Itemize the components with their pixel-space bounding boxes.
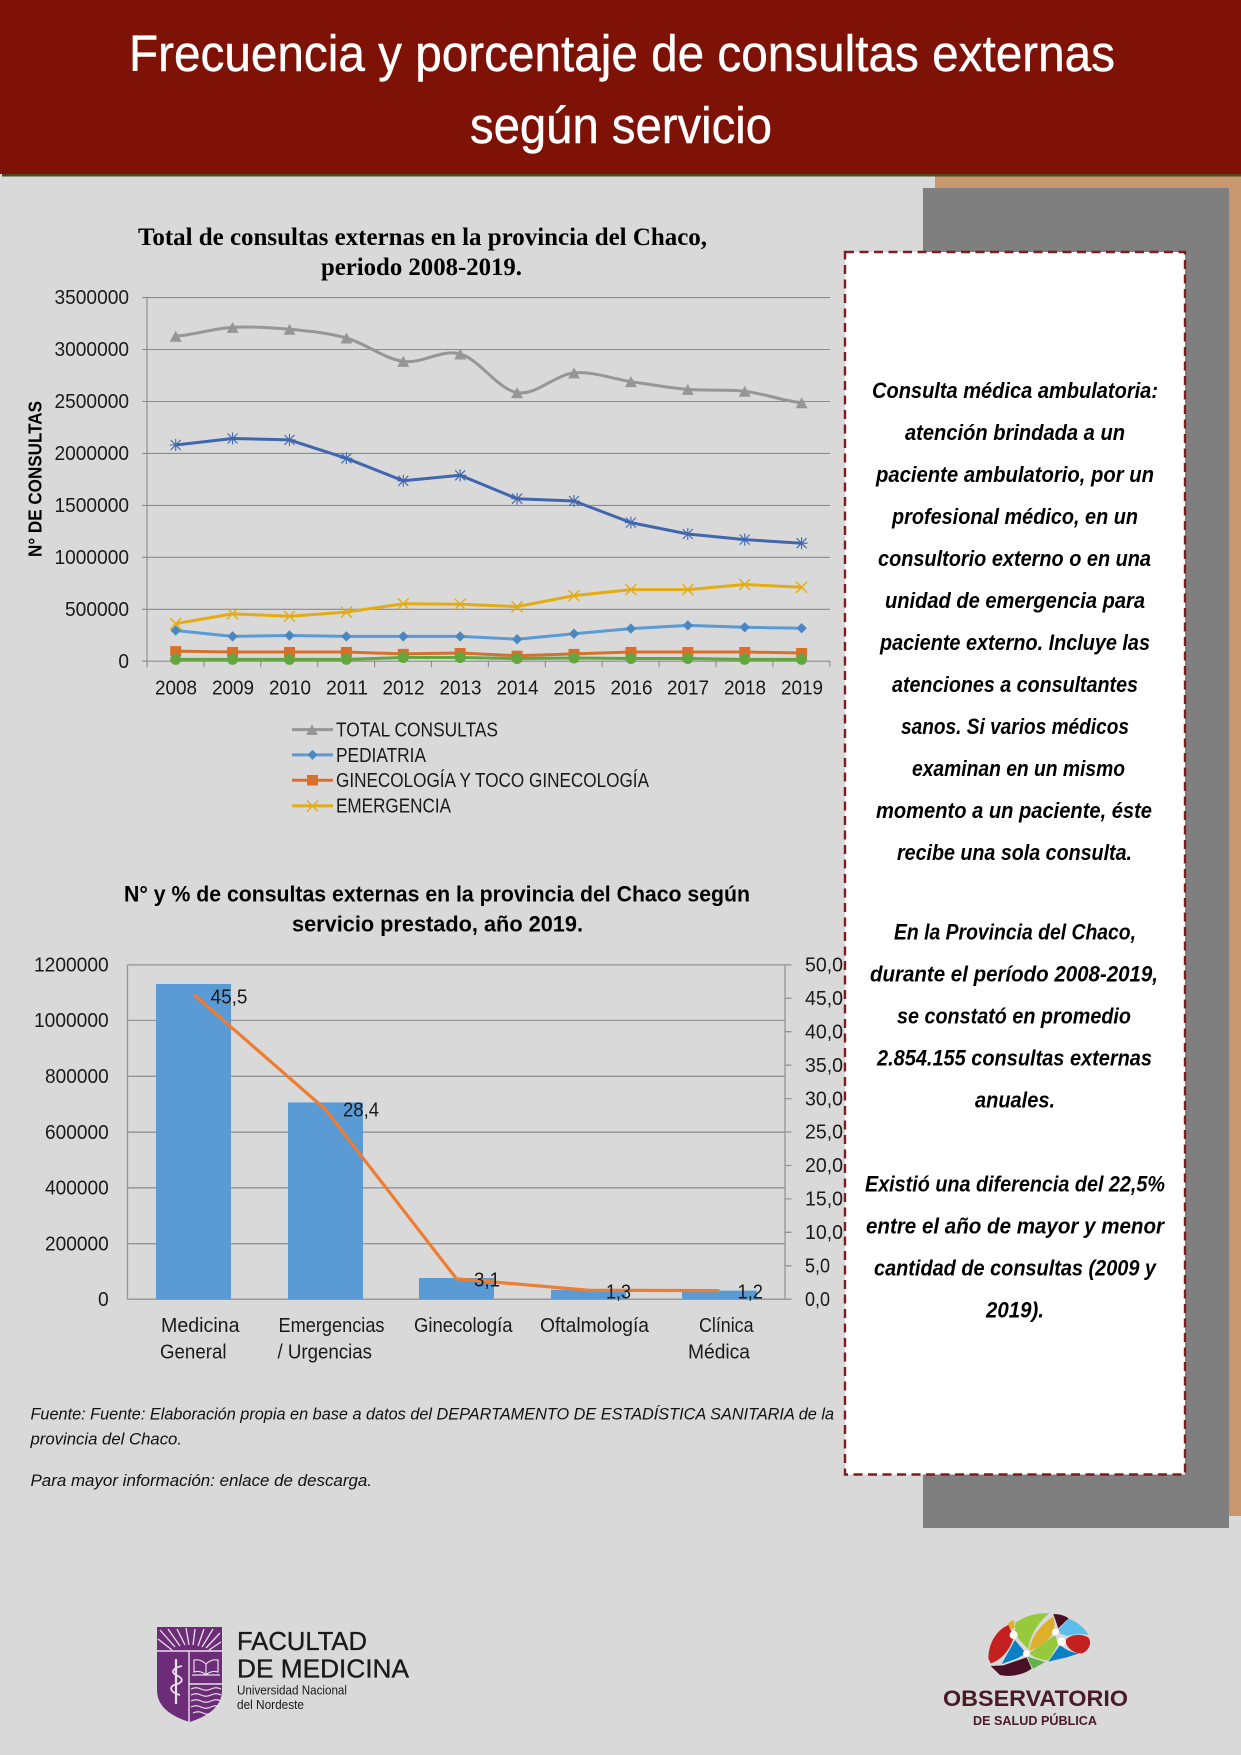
definition panel <box>845 252 1185 1474</box>
series: ginecologia <box>176 651 802 656</box>
left axis labels: 800000 <box>45 1066 109 1088</box>
source note <box>30 1404 834 1490</box>
x axis labels: 2014 <box>496 678 538 700</box>
line chart: total consultations 2008-2019 <box>24 224 830 818</box>
x axis labels: 2009 <box>212 678 254 700</box>
paragraph: definition: paciente externo. Incluye las <box>879 630 1150 655</box>
faculty name <box>237 1626 410 1712</box>
legend: PEDIATRIA <box>336 745 427 767</box>
right axis labels: 50,0 <box>805 954 843 976</box>
x axis labels: 2015 <box>554 678 596 700</box>
title: Frecuencia y porcentaje de consultas externas <box>129 25 1115 82</box>
left axis labels <box>34 954 109 1311</box>
left axis labels: 600000 <box>45 1122 109 1144</box>
series: green <box>176 658 802 659</box>
right axis labels: 40,0 <box>805 1022 843 1044</box>
right axis labels: 30,0 <box>805 1088 843 1110</box>
category labels: Medicina <box>161 1315 240 1337</box>
x axis labels: 2018 <box>724 678 766 700</box>
y axis labels: 1500000 <box>54 495 129 517</box>
y axis labels: 2000000 <box>54 443 129 465</box>
paragraph: definition: consultorio externo o en una <box>878 546 1151 571</box>
source note: Para mayor información: enlace de descarga. <box>30 1471 372 1490</box>
x axis labels: 2017 <box>667 678 709 700</box>
category labels: Médica <box>688 1342 751 1364</box>
series: total consultas <box>176 327 802 403</box>
data labels: 45,5 <box>210 986 248 1008</box>
faculty name: Universidad Nacional <box>237 1682 347 1698</box>
paragraph: definition: atención brindada a un <box>905 420 1125 445</box>
paragraph: definition: recibe una sola consulta. <box>897 840 1132 865</box>
x axis labels: 2016 <box>610 678 652 700</box>
bars <box>156 984 757 1299</box>
line chart title: Total de consultas externas en la provincia del Chaco, <box>138 224 707 251</box>
data labels: 3,1 <box>474 1270 500 1292</box>
icon: brain <box>988 1613 1090 1676</box>
decorative peach panel <box>935 176 1241 1516</box>
paragraph: definition: sanos. Si varios médicos <box>901 714 1129 739</box>
paragraph: difference <box>865 1172 1165 1322</box>
legend: GINECOLOGÍA Y TOCO GINECOLOGÍA <box>336 769 650 792</box>
category labels: General <box>160 1342 226 1364</box>
right axis labels: 45,0 <box>805 988 843 1010</box>
y axis labels: 3000000 <box>54 339 129 361</box>
paragraph: definition: examinan en un mismo <box>912 756 1125 781</box>
right axis labels: 35,0 <box>805 1055 843 1077</box>
left axis labels: 200000 <box>45 1234 109 1256</box>
category labels <box>160 1315 754 1364</box>
category labels: / Urgencias <box>278 1342 372 1364</box>
y axis labels: 500000 <box>65 599 129 621</box>
paragraph: average <box>870 920 1158 1112</box>
data labels: 28,4 <box>343 1100 379 1122</box>
paragraph: definition: paciente ambulatorio, por un <box>875 462 1154 487</box>
y axis labels: 3500000 <box>54 287 129 309</box>
y axis title: N° DE CONSULTAS <box>24 401 46 557</box>
paragraph: average: durante el período 2008-2019, <box>870 962 1158 986</box>
left axis labels: 1000000 <box>34 1010 109 1032</box>
title <box>129 25 1115 154</box>
paragraph: definition: unidad de emergencia para <box>885 588 1145 613</box>
data labels: 1,3 <box>606 1282 631 1304</box>
category labels: Oftalmología <box>540 1315 650 1337</box>
x axis labels: 2019 <box>781 678 823 700</box>
paragraph: definition: atenciones a consultantes <box>892 672 1138 697</box>
percentage line <box>194 995 720 1291</box>
source note: provincia del Chaco. <box>30 1430 182 1448</box>
paragraph: definition: profesional médico, en un <box>891 504 1138 529</box>
faculty name: del Nordeste <box>237 1697 304 1712</box>
left axis labels: 0 <box>98 1289 109 1311</box>
title: según servicio <box>470 97 772 154</box>
icon: shield <box>157 1627 222 1722</box>
category labels: Clínica <box>699 1315 754 1337</box>
paragraph: average: se constató en promedio <box>897 1004 1131 1028</box>
grey backing panel <box>923 188 1229 1528</box>
right axis labels: 5,0 <box>805 1256 830 1278</box>
combo chart title: servicio prestado, año 2019. <box>292 912 583 936</box>
category labels: Emergencias <box>278 1315 384 1337</box>
right axis labels <box>805 954 843 1311</box>
combo chart: consultations by service 2019 <box>34 882 843 1364</box>
observatory name: DE SALUD PÚBLICA <box>973 1713 1098 1728</box>
y axis labels: 2500000 <box>54 391 129 413</box>
paragraph: definition <box>872 378 1158 865</box>
logo: Observatorio de Salud Pública <box>943 1613 1128 1728</box>
line chart title: periodo 2008-2019. <box>321 254 522 281</box>
x axis labels: 2011 <box>326 678 368 700</box>
x axis labels: 2010 <box>269 678 311 700</box>
y axis labels <box>54 287 129 673</box>
category labels: Ginecología <box>414 1315 513 1337</box>
paragraph: average: 2.854.155 consultas externas <box>876 1046 1152 1070</box>
series: dark blue <box>176 438 802 543</box>
faculty name: DE MEDICINA <box>237 1654 410 1684</box>
legend <box>292 720 650 818</box>
series: emergencia <box>176 584 802 624</box>
left axis labels: 1200000 <box>34 954 109 976</box>
x axis labels: 2012 <box>382 678 424 700</box>
legend: EMERGENCIA <box>336 796 452 818</box>
source note: Fuente: Fuente: Elaboración propia en base a datos del DEPARTAMENTO DE ESTADÍSTICA SANITARIA de la <box>30 1404 834 1424</box>
data labels <box>210 986 763 1304</box>
combo chart title <box>124 882 750 936</box>
observatory name <box>943 1686 1128 1728</box>
paragraph: difference: entre el año de mayor y menor <box>866 1214 1165 1238</box>
observatory name: OBSERVATORIO <box>943 1686 1128 1711</box>
left axis labels: 400000 <box>45 1178 109 1200</box>
y axis labels: 0 <box>118 651 129 673</box>
header banner <box>0 0 1241 176</box>
paragraph: difference: Existió una diferencia del 22,5% <box>865 1172 1165 1196</box>
data labels: 1,2 <box>738 1282 763 1304</box>
paragraph: definition: Consulta médica ambulatoria: <box>872 378 1158 403</box>
paragraph: difference: cantidad de consultas (2009 y <box>874 1256 1158 1280</box>
right axis labels: 15,0 <box>805 1188 843 1210</box>
right axis labels: 25,0 <box>805 1122 843 1144</box>
paragraph: average: En la Provincia del Chaco, <box>894 920 1136 944</box>
line chart title <box>138 224 707 281</box>
legend: TOTAL CONSULTAS <box>336 720 498 742</box>
x axis labels: 2013 <box>440 678 482 700</box>
faculty name: FACULTAD <box>237 1626 367 1656</box>
y axis labels: 1000000 <box>54 547 129 569</box>
paragraph: average: anuales. <box>975 1088 1055 1112</box>
series: pediatria <box>176 625 802 639</box>
paragraph: difference: 2019). <box>985 1298 1044 1322</box>
right axis labels: 10,0 <box>805 1222 843 1244</box>
logo: Facultad de Medicina <box>157 1626 410 1722</box>
combo chart title: N° y % de consultas externas en la provincia del Chaco según <box>124 882 750 906</box>
right axis labels: 20,0 <box>805 1155 843 1177</box>
x axis labels <box>155 678 823 700</box>
right axis labels: 0,0 <box>805 1289 830 1311</box>
x axis labels: 2008 <box>155 678 197 700</box>
paragraph: definition: momento a un paciente, éste <box>876 798 1152 823</box>
